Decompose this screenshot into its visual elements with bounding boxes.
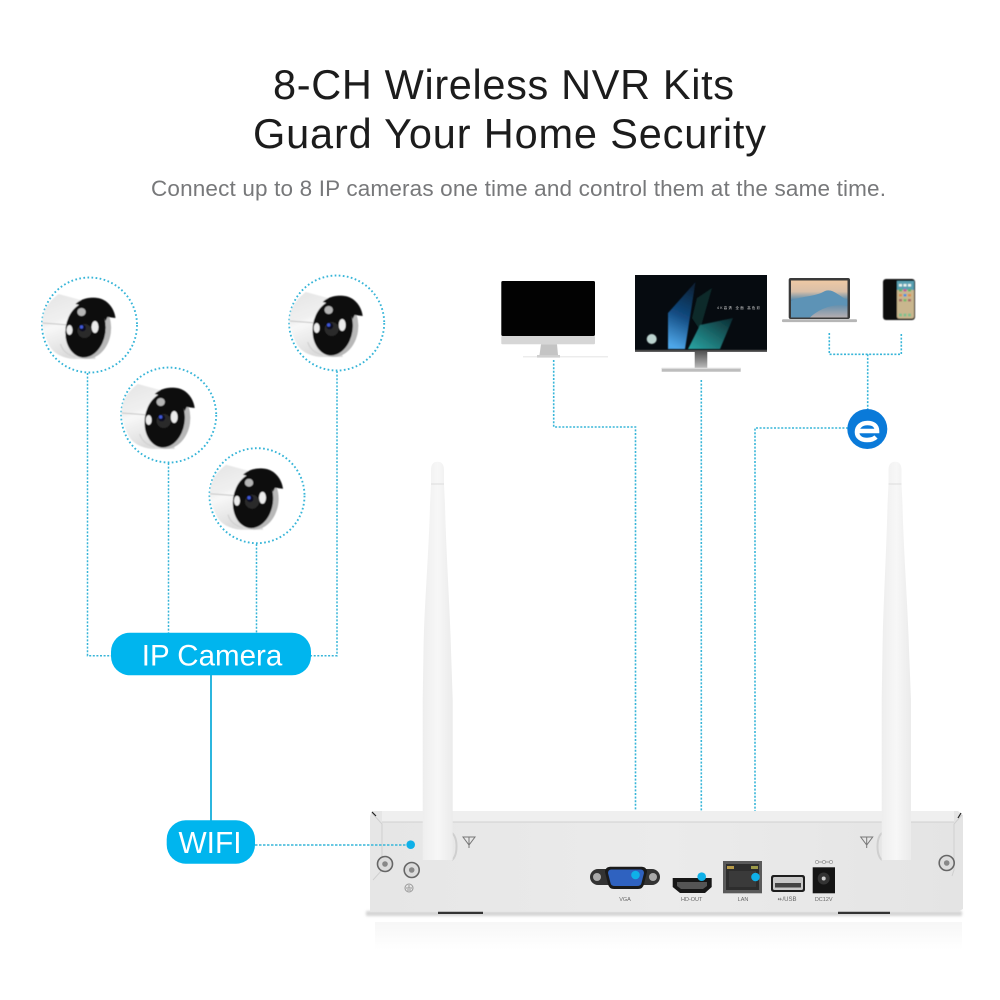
LAN port [723,861,762,903]
icon: browser e [847,409,887,449]
connection dots [406,840,760,881]
subtitle: Connect up to 8 IP cameras one time and control them at the same time. [151,176,886,201]
monitor VGA [501,281,608,358]
title: 8-CH Wireless NVR Kits [273,61,734,108]
recorder body [370,811,963,912]
title: Guard Your Home Security [253,110,766,157]
camera 2 [121,368,216,462]
ground symbol [405,884,413,892]
IP Camera pill: IP Camera [142,640,283,672]
IP Camera pill [111,633,311,675]
VGA port [590,867,660,903]
title [253,61,766,157]
DC power port [813,860,835,903]
HDMI port [673,878,712,903]
WIFI pill: WIFI [178,825,242,860]
monitor HDMI [635,275,767,372]
camera connector lines [88,371,337,656]
recorder shadow [366,911,962,916]
monitor HDMI: 4K高清 全面 高色彩 [717,305,761,310]
USB port [771,875,805,903]
WIFI pill [167,820,255,864]
camera 4 [289,276,384,370]
smartphone [883,279,915,320]
camera 1 [42,278,137,372]
camera 3 [210,448,304,543]
WIFI connector line [255,844,408,846]
HDMI port: HD-OUT [681,897,703,903]
reflection under NVR [375,922,962,950]
link from IP Camera to WIFI [210,675,212,821]
antenna marks [463,837,475,848]
NVR recorder [366,811,963,916]
antenna right [878,462,911,860]
USB port: ⇷/USB [777,897,797,903]
device connector lines [554,333,901,877]
screws [378,856,954,878]
VGA port: VGA [619,897,631,903]
antenna left [423,462,456,860]
DC power port: DC12V [815,897,833,903]
laptop [782,278,857,322]
LAN port: LAN [738,897,748,903]
